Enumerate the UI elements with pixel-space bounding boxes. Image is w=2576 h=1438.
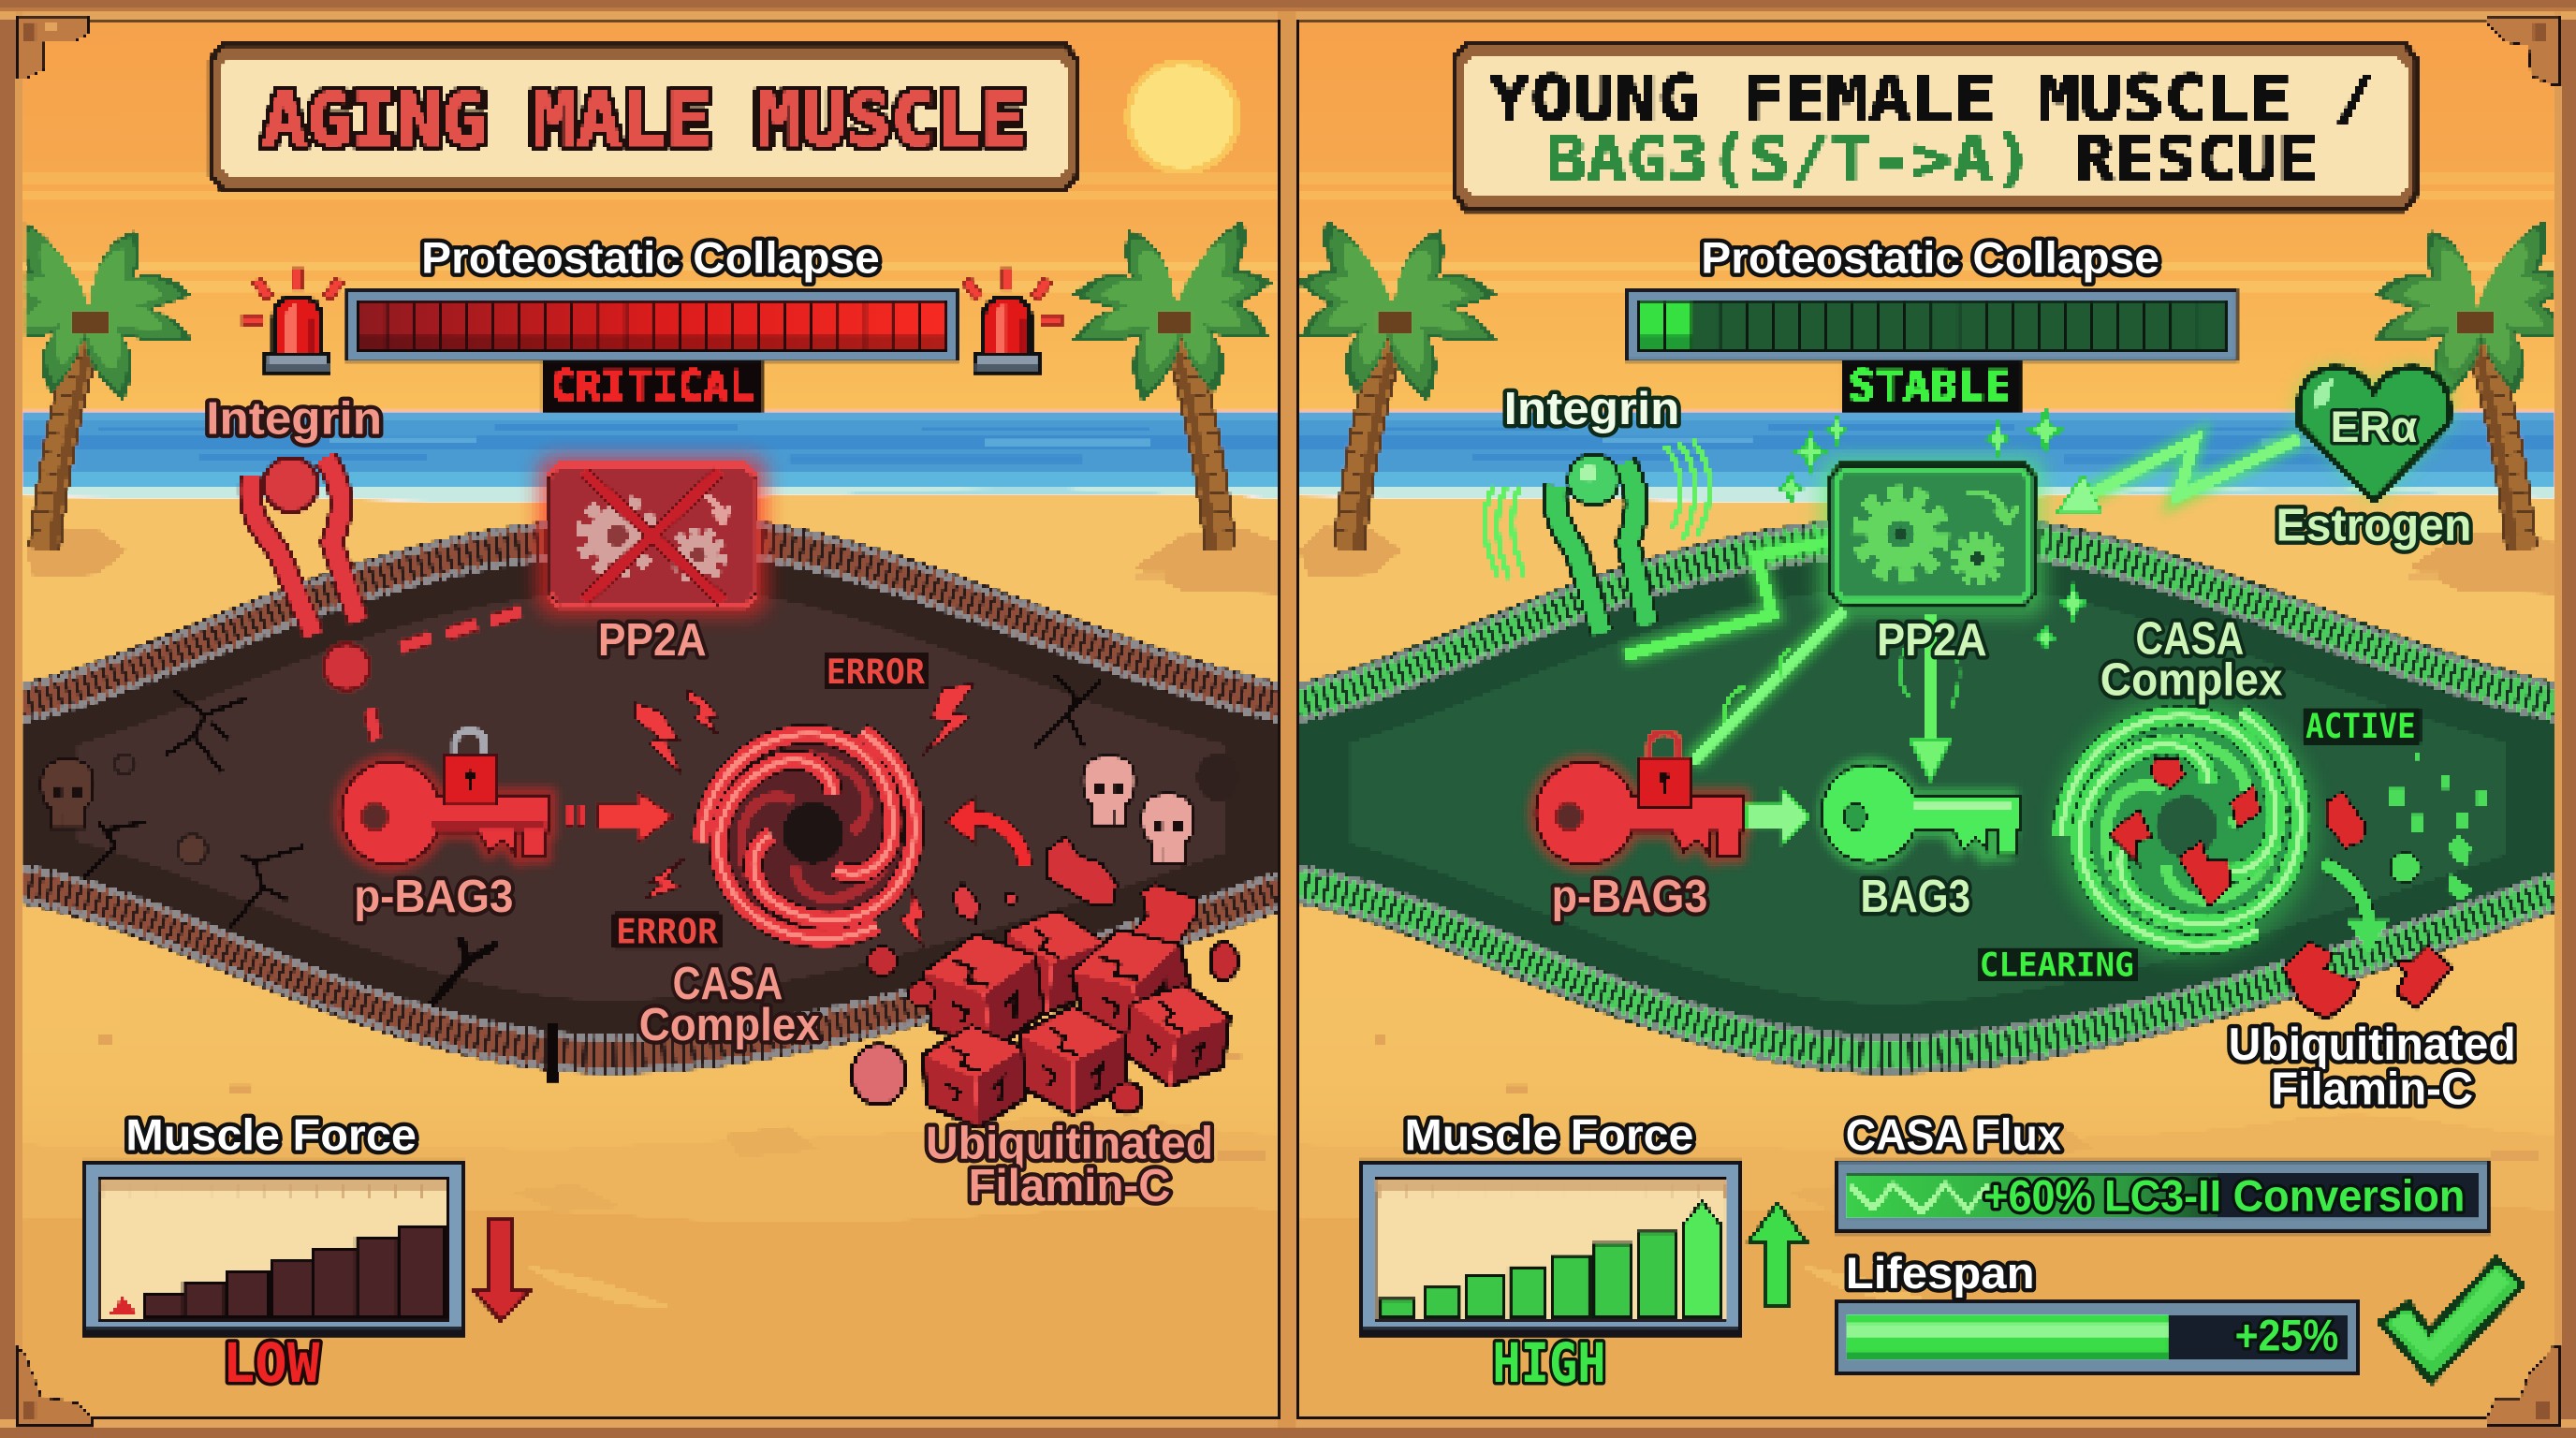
arrow: estrogen to PP2A	[2058, 439, 2298, 513]
title banner: young female muscle	[1452, 41, 2418, 212]
arrow: p-BAG3 to BAG3	[1748, 790, 1808, 843]
label: active: ACTIVE	[2305, 706, 2416, 746]
icon: locked p-BAG3 key	[344, 731, 547, 862]
arrow: force rising	[1749, 1204, 1806, 1306]
label: PP2A: PP2A	[598, 615, 707, 666]
callout boxes: active and clearing	[1976, 707, 2422, 982]
status tag: stable	[1841, 361, 2021, 411]
label: CASA: CASA	[2135, 613, 2244, 664]
icon: ubiquitinated filamin-C rubble	[853, 836, 1237, 1130]
right title text: YOUNG FEMALE MUSCLE /	[1488, 62, 2376, 135]
label: integrin: Integrin	[206, 393, 382, 444]
panel: aging male muscle	[23, 43, 1280, 1395]
label: filamin-C: Filamin-C	[2271, 1064, 2473, 1114]
icon: integrin	[250, 459, 359, 634]
label: clearing: CLEARING	[1980, 946, 2134, 984]
icon: alarm sirens	[243, 270, 1061, 372]
label: complex: Complex	[639, 1000, 820, 1050]
meter: CASA flux	[1835, 1160, 2489, 1234]
label: PP2A: PP2A	[1877, 615, 1987, 666]
icon: cleared particles	[2391, 753, 2485, 901]
arrow: export to membrane	[2323, 864, 2389, 953]
icon: filamin fragments in vortex	[2109, 759, 2365, 907]
icon: skulls	[1083, 756, 1194, 862]
meter: lifespan	[1835, 1301, 2359, 1375]
dim debris in cell	[41, 753, 1238, 864]
arrow: reverse curved flow	[946, 797, 1025, 866]
icon: PP2A active	[1821, 457, 2043, 614]
sun	[1125, 59, 1240, 174]
meter value: lifespan: +25%	[2235, 1312, 2338, 1361]
label: BAG3: BAG3	[1861, 872, 1970, 922]
label: complex: Complex	[2100, 654, 2283, 705]
icon: estrogen receptor heart	[2299, 368, 2449, 500]
label: ubiquitinated: Ubiquitinated	[2229, 1020, 2516, 1070]
chart: muscle force low	[82, 1160, 465, 1336]
panel: young female muscle / BAG3 rescue	[1299, 41, 2556, 1395]
title banner: aging male muscle	[209, 43, 1079, 192]
arrow: PP2A to BAG3	[1900, 616, 1959, 779]
label: filamin-C: Filamin-C	[969, 1161, 1170, 1211]
sparkles	[1778, 411, 2086, 650]
label: muscle force: Muscle Force	[125, 1110, 417, 1160]
icon: PP2A disabled	[539, 457, 766, 614]
right title text	[1488, 62, 2376, 196]
label: error top: ERROR	[827, 652, 926, 692]
label: CASA flux: CASA Flux	[1846, 1110, 2061, 1160]
arrow: force falling	[473, 1221, 529, 1319]
icon: checkmark	[2382, 1260, 2522, 1380]
gauge: proteostatic collapse critical	[346, 287, 958, 361]
right title text: BAG3(S/T->A) RESCUE	[1545, 123, 2318, 196]
label: CASA: CASA	[673, 959, 783, 1009]
icon: jammed CASA vortex	[666, 669, 991, 997]
icon: BAG3 key	[1823, 767, 2019, 860]
arrow: integrin to PP2A signal	[1625, 542, 1827, 655]
left panel text labels	[125, 233, 1213, 1395]
gauge label: Proteostatic Collapse	[1701, 233, 2159, 283]
arrow: p-BAG3 to CASA	[566, 792, 674, 843]
icon: locked p-BAG3 key	[1538, 733, 1741, 862]
status: high: HIGH	[1492, 1331, 1606, 1395]
label: muscle force: Muscle Force	[1405, 1110, 1693, 1160]
status tag: critical	[542, 361, 762, 411]
palm trees	[0, 220, 2574, 550]
cell cross-section: muscle fibre	[23, 526, 1280, 1070]
callout box: error	[611, 653, 929, 949]
arrow: PP2A dephosphorylates p-BAG3	[1692, 611, 1843, 762]
label: p-BAG3: p-BAG3	[1552, 872, 1707, 922]
status: low: LOW	[223, 1331, 319, 1395]
status: critical: CRITICAL	[550, 361, 754, 411]
label: ubiquitinated: Ubiquitinated	[926, 1118, 1213, 1168]
membrane cracks	[82, 674, 1101, 1081]
status: stable: STABLE	[1849, 361, 2012, 411]
meter value: LC3 conversion: +60% LC3-II Conversion	[1983, 1171, 2465, 1221]
label: error bottom: ERROR	[616, 911, 719, 951]
icon: broken signal dashes	[324, 611, 520, 740]
cell cross-section: healthy fibre	[1299, 526, 2556, 1070]
icon: active integrin	[1485, 440, 1710, 633]
gauge: proteostatic collapse stable	[1626, 287, 2237, 361]
icon: ubiquitinated filamin fragments	[2283, 942, 2451, 1019]
label: integrin: Integrin	[1504, 384, 1679, 434]
gauge label: Proteostatic Collapse	[421, 233, 880, 283]
label: ER alpha: ERα	[2330, 403, 2417, 452]
icon: error lightning bolts	[636, 683, 974, 946]
label: lifespan: Lifespan	[1846, 1249, 2035, 1299]
left title text: AGING MALE MUSCLE	[262, 78, 1026, 162]
chart: muscle force high	[1360, 1160, 1741, 1336]
label: estrogen: Estrogen	[2276, 500, 2471, 550]
icon: clearing CASA vortex	[2021, 644, 2386, 1010]
right panel text labels	[1405, 233, 2516, 1395]
label: p-BAG3: p-BAG3	[354, 872, 513, 922]
